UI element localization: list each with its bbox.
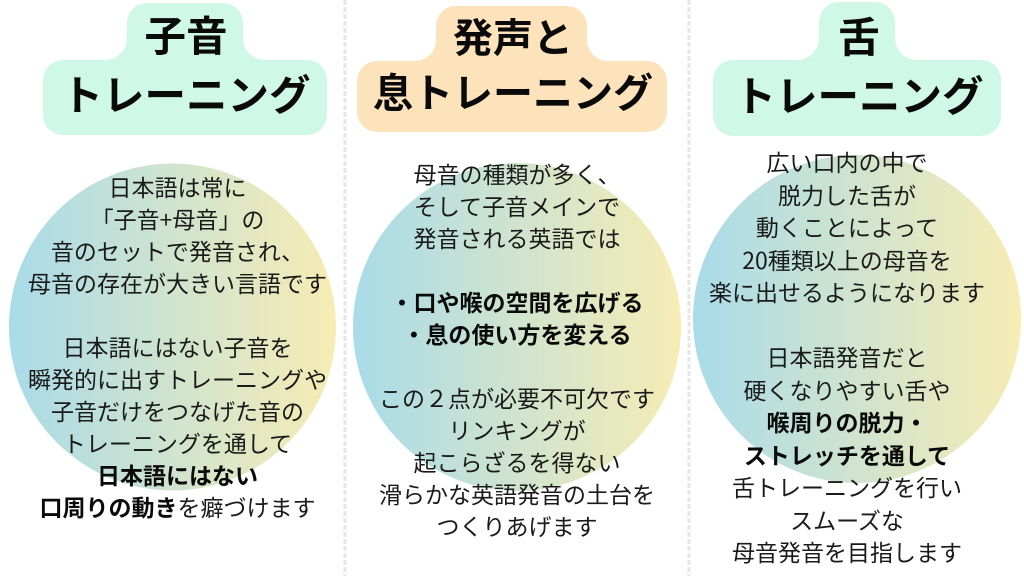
text: 子音 description: 「子音+母音」の: [91, 201, 264, 235]
heading: 発声と息トレーニング: 発声と: [453, 17, 573, 61]
text: 発声と息 description: 滑らかな英語発音の土台を: [379, 482, 655, 508]
text: 舌 description: 脱力した舌が: [778, 182, 916, 208]
heading: 舌トレーニング: トレーニング: [734, 73, 984, 120]
text: 舌 description: 硬くなりやすい舌や: [744, 378, 950, 404]
panel 3 header background: [713, 2, 1001, 136]
panel 3 gradient circle: [693, 155, 1021, 483]
text: 舌 description: 日本語発音だと: [766, 345, 928, 371]
heading: 発声と息トレーニング: [373, 17, 653, 116]
text: 舌 description: 楽に出せるようになります: [709, 280, 985, 306]
text: 舌 description: スムーズな: [790, 508, 904, 534]
text: 子音 description: 瞬発的に出すトレーニングや: [28, 367, 327, 393]
text: 発声と息 description: ・息の使い方を変える: [402, 322, 632, 348]
text: 子音 description: 日本語にはない子音を: [62, 335, 292, 361]
text: 発声と息 description: リンキングが: [448, 418, 586, 444]
text: 舌 description: 母音発音を目指します: [732, 540, 962, 566]
panel 1 header background: [43, 3, 327, 135]
heading: 発声と息トレーニング: 息トレーニング: [373, 72, 653, 116]
text: 発声と息 description: ・口や喉の空間を広げる: [390, 290, 644, 316]
panel 1 gradient circle: [9, 164, 336, 490]
heading: 子音トレーニング: トレーニング: [61, 72, 310, 119]
text: 子音 description: 子音だけをつなげた音の: [51, 399, 304, 425]
text: 舌 description: ストレッチを通して: [744, 442, 950, 468]
text: 発声と息 description: 起こらざるを得ない: [414, 450, 620, 476]
text: 発声と息 description: 母音の種類が多く、: [414, 162, 620, 188]
text: 子音 description: [28, 175, 327, 521]
text: 舌 description: 喉周りの脱力・: [766, 410, 928, 436]
text: 舌 description: 広い口内の中で: [766, 150, 928, 176]
heading: 舌トレーニング: [734, 14, 984, 120]
text: 舌 description: 舌トレーニングを行い: [732, 475, 962, 501]
panel 2 gradient circle: [353, 163, 681, 491]
text: 発声と息 description: 発音される英語では: [414, 226, 620, 252]
text: 発声と息 description: [379, 162, 655, 540]
text: 子音 description: トレーニングを通して: [63, 431, 292, 457]
heading: 舌トレーニング: 舌: [838, 14, 880, 61]
text: 発声と息 description: つくりあげます: [436, 514, 598, 540]
text: 舌 description: 20種類以上の母音を: [742, 242, 952, 276]
text: 舌 description: 動くことによって: [756, 215, 938, 241]
text: 子音 description: 日本語は常に: [108, 175, 246, 201]
text: 子音 description: 日本語にはない: [97, 463, 258, 489]
heading: 子音トレーニング: 子音: [144, 13, 228, 60]
text: 子音 description: 音のセットで発音され、: [51, 239, 304, 265]
text: 発声と息 description: この２点が必要不可欠です: [379, 386, 655, 412]
text: 子音 description: 母音の存在が大きい言語です: [28, 271, 327, 297]
panel 2 header background: [357, 6, 667, 132]
text: 発声と息 description: そして子音メインで: [414, 194, 620, 220]
heading: 子音トレーニング: [61, 13, 310, 119]
text: 子音 description: 口周りの動きを癖づけます: [40, 495, 316, 521]
text: 舌 description: [709, 150, 985, 566]
